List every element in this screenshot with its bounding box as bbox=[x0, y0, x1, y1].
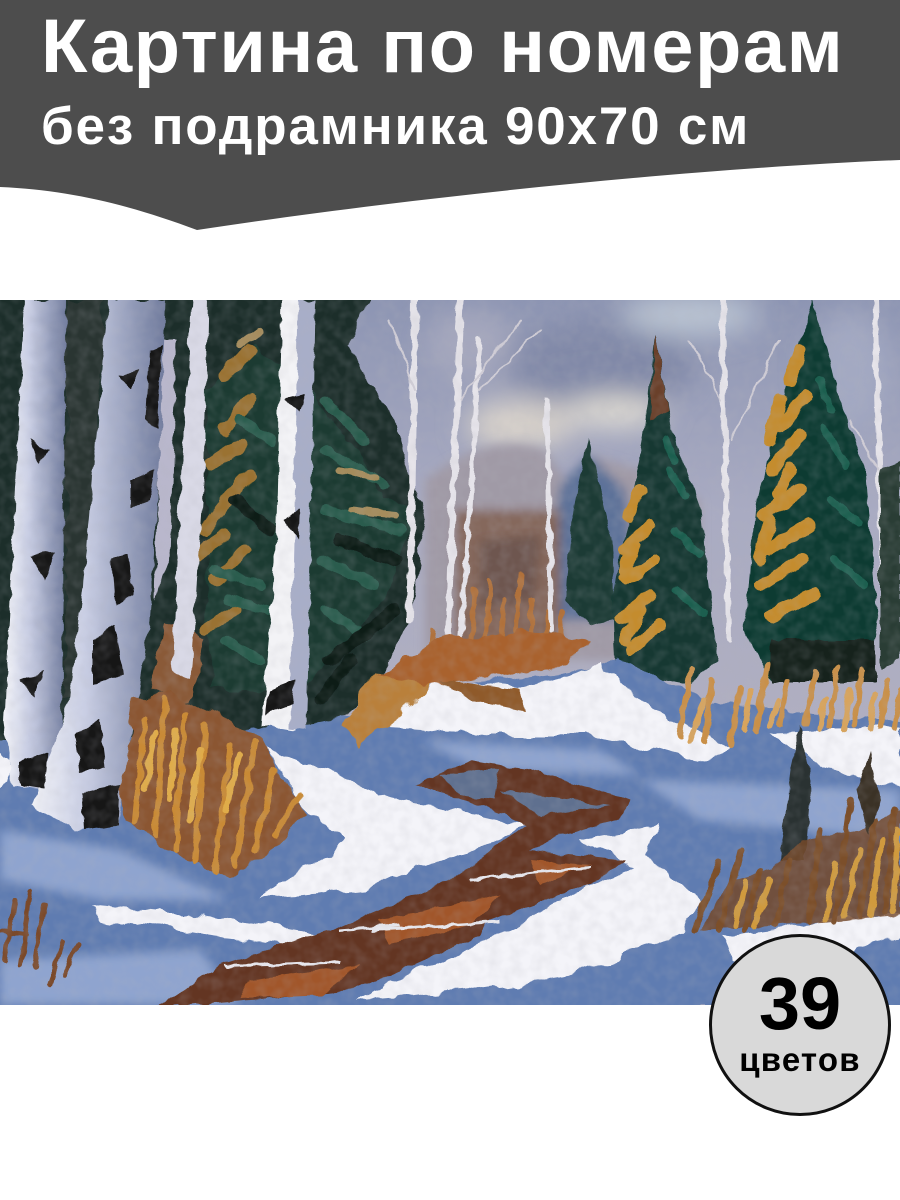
badge: 39 colours bbox=[709, 934, 891, 1116]
subtitle: без подрамника 90х70 см bbox=[41, 97, 750, 156]
bark markings bbox=[20, 345, 305, 830]
central thin white birches bbox=[390, 300, 885, 670]
lighter snow shading bbox=[0, 740, 900, 1005]
spruce boughs on the left bbox=[195, 330, 400, 700]
header banner bbox=[0, 0, 900, 230]
spruce right middle bbox=[612, 335, 718, 685]
left dark forest bbox=[0, 290, 425, 750]
ground snow base bbox=[0, 660, 900, 1010]
left birch trunks bbox=[4, 300, 315, 830]
spruce right large bbox=[745, 300, 900, 682]
sky bbox=[344, 300, 900, 1005]
small spruce centre bbox=[565, 436, 614, 625]
badge label: цветов bbox=[739, 1041, 861, 1078]
paint texture overlay bbox=[0, 300, 900, 1005]
orange grass left bbox=[0, 690, 310, 985]
stream bbox=[155, 760, 630, 1008]
painting: winter forest stream bbox=[0, 300, 900, 1005]
snow highlights bbox=[0, 662, 900, 1000]
foreground right bush bbox=[695, 725, 900, 930]
badge number: 39 bbox=[759, 962, 841, 1045]
title: Картина по номерам bbox=[41, 4, 844, 89]
orange grass centre and right bbox=[345, 630, 900, 745]
distant trees and mountain bbox=[425, 444, 700, 665]
